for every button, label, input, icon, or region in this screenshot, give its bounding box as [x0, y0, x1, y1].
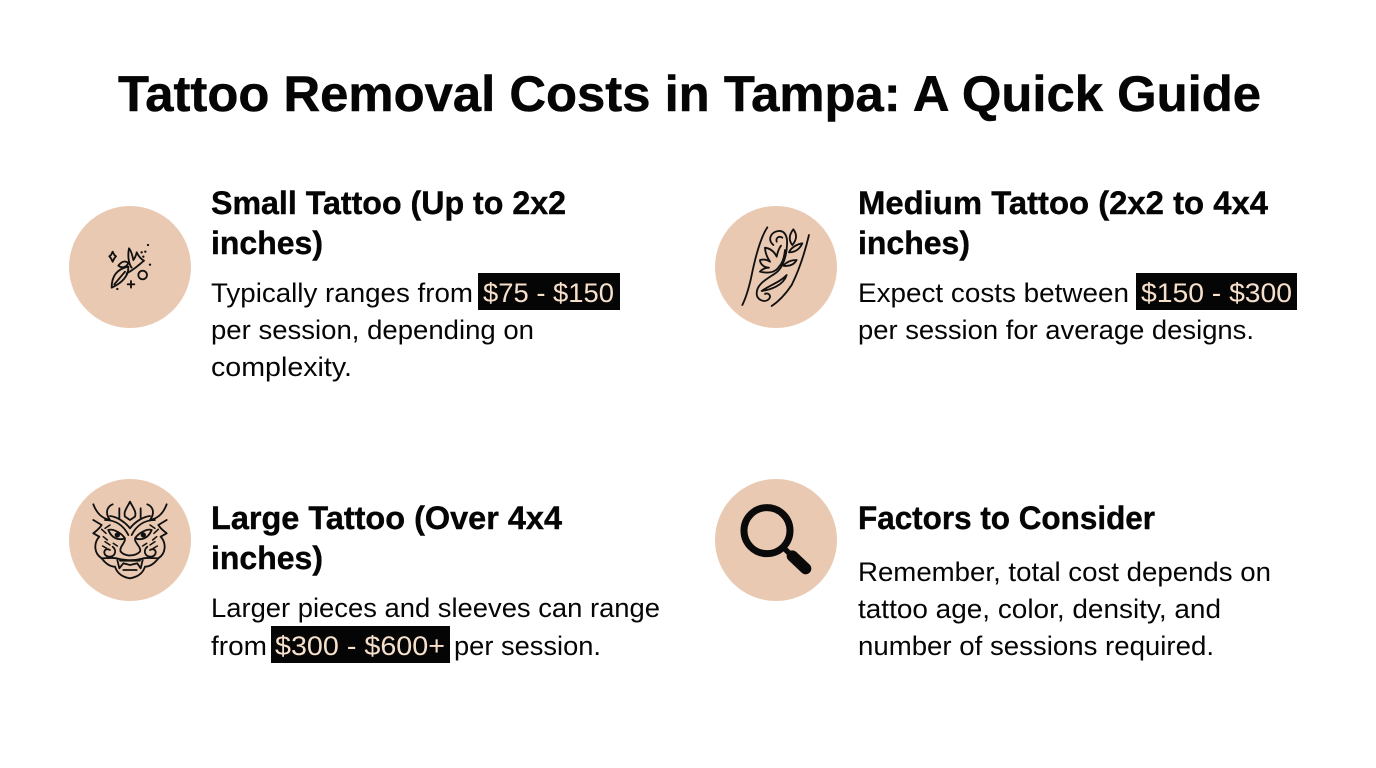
heading: small tattoo: Small Tattoo (Up to 2x2 [211, 185, 566, 221]
text: factors description: Remember, total cost depends on [858, 557, 1271, 587]
text: medium tattoo description [858, 273, 1297, 345]
text: large tattoo description: from [211, 631, 267, 661]
panel: large tattoo [69, 479, 660, 663]
text: small tattoo description: per session, depending on [211, 315, 534, 345]
heading: medium tattoo: inches) [858, 225, 970, 261]
text: factors description: tattoo age, color, density, and [858, 594, 1221, 624]
icon: magnifying glass [715, 479, 837, 601]
text: factors description: number of sessions required. [858, 631, 1214, 661]
text: small tattoo description: Typically ranges from [211, 278, 473, 308]
icon: small floral tattoo [69, 206, 191, 328]
text: large tattoo description [211, 593, 660, 663]
title: Tattoo Removal Costs in Tampa: A Quick Guide [118, 66, 1261, 122]
heading: large tattoo: Large Tattoo (Over 4x4 [211, 500, 562, 536]
heading: small tattoo [211, 185, 566, 261]
text: large tattoo description: Larger pieces and sleeves can range [211, 593, 660, 623]
heading: factors to consider: Factors to Consider [858, 500, 1155, 536]
heading: medium tattoo: Medium Tattoo (2x2 to 4x4 [858, 185, 1268, 221]
panel: small tattoo [69, 185, 620, 382]
text: small tattoo description: complexity. [211, 352, 352, 382]
text: small tattoo description [211, 273, 620, 382]
panel: factors to consider [715, 479, 1271, 661]
heading: medium tattoo [858, 185, 1268, 261]
price highlight: $300 - $600+: $300 - $600+ [275, 631, 445, 661]
text: large tattoo description: per session. [454, 631, 601, 661]
heading: large tattoo [211, 500, 562, 576]
price highlight: $75 - $150: $75 - $150 [483, 278, 614, 308]
text: medium tattoo description: Expect costs between [858, 278, 1129, 308]
text: factors description [858, 557, 1271, 661]
text: medium tattoo description: per session for average designs. [858, 315, 1254, 345]
price highlight: $150 - $300: $150 - $300 [1141, 278, 1292, 308]
icon: oni mask tattoo [69, 479, 191, 601]
icon: floral forearm tattoo [715, 206, 837, 328]
heading: large tattoo: inches) [211, 540, 323, 576]
heading: small tattoo: inches) [211, 225, 323, 261]
panel: medium tattoo [715, 185, 1297, 345]
